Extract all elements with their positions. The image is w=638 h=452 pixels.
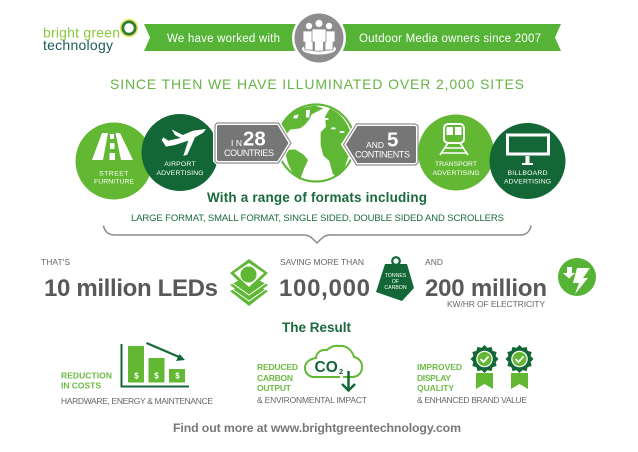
text: reduced carbon output: & ENVIRONMENTAL IMPACT: [257, 395, 367, 405]
icon: carbon weight: CARBON: [384, 285, 407, 291]
logo: [43, 20, 138, 53]
text: reduction in costs: [61, 370, 213, 406]
circle: billboard advertising: ADVERTISING: [504, 178, 551, 186]
tag: in 28 countries: [214, 122, 292, 164]
icon: quality badge one: [470, 345, 498, 389]
circle: airport advertising: ADVERTISING: [156, 170, 204, 177]
globe: [278, 104, 354, 182]
circle: transport advertising: ADVERTISING: [432, 170, 480, 177]
text: reduced carbon output: CARBON: [257, 373, 293, 383]
tag: and 5 continents: 5: [387, 128, 398, 152]
circle: transport advertising: TRANSPORT: [435, 161, 477, 168]
text: reduction in costs: HARDWARE, ENERGY & MAINTENANCE: [61, 396, 213, 406]
text: reduction in costs: IN COSTS: [61, 380, 101, 390]
logo: bright green: [43, 24, 120, 40]
circle: airport advertising: AIRPORT: [164, 161, 196, 168]
text: format list: LARGE FORMAT, SMALL FORMAT, SINGLE SIDED, DOUBLE SIDED AND SCROLLERS: [131, 213, 504, 224]
text: improved display quality: [417, 362, 527, 405]
circle: street furniture: [76, 122, 152, 200]
tag: and 5 continents: AND: [366, 140, 384, 150]
text: improved display quality: & ENHANCED BRAND VALUE: [417, 395, 527, 405]
ribbon: outdoor media owners: Outdoor Media owners since 2007: [359, 33, 541, 45]
subheading: range of formats: With a range of formats including: [207, 190, 427, 205]
icon: CO2 cloud: CO: [314, 359, 338, 376]
brace: [104, 226, 531, 243]
chart: reduction in costs: $: [154, 372, 159, 380]
circle: street furniture: STREET: [99, 170, 129, 178]
icon: carbon weight: OF: [392, 279, 399, 285]
icon: carbon weight: TONNES: [385, 273, 407, 279]
tag: in 28 countries: COUNTRIES: [224, 148, 274, 158]
tag: in 28 countries: IN: [231, 138, 242, 148]
chart: reduction in costs: [122, 343, 189, 386]
text: reduced carbon output: [257, 362, 367, 405]
text: reduced carbon output: REDUCED: [257, 362, 298, 372]
logo: technology: [43, 37, 113, 53]
text: improved display quality: DISPLAY: [417, 373, 451, 383]
icon: quality badge two: [506, 345, 534, 389]
tag: and 5 continents: CONTINENTS: [355, 150, 410, 160]
icon: CO2 cloud: [305, 346, 362, 390]
ribbon: we have worked with: We have worked with: [167, 33, 280, 45]
stat: 200 million: [425, 257, 547, 309]
circle: transport advertising: [418, 114, 494, 190]
icon: LED stack: [230, 259, 268, 306]
icon: CO2 cloud: 2: [339, 367, 343, 376]
circle: billboard advertising: [490, 123, 566, 199]
stat: 10 million LEDs: THAT'S: [41, 257, 70, 267]
text: improved display quality: IMPROVED: [417, 362, 462, 372]
circle: billboard advertising: BILLBOARD: [508, 170, 548, 177]
stat: 200 million: AND: [425, 257, 443, 267]
stat: 100,000: [279, 257, 370, 302]
text: improved display quality: QUALITY: [417, 383, 454, 393]
stat: 200 million: KW/HR OF ELECTRICITY: [447, 299, 545, 309]
tag: in 28 countries: 28: [243, 128, 266, 150]
text: reduced carbon output: OUTPUT: [257, 383, 292, 393]
stat: 10 million LEDs: [41, 257, 218, 302]
tag: and 5 continents: [342, 123, 419, 166]
heading: the result: The Result: [282, 320, 352, 335]
stat: 100,000: SAVING MORE THAN: [280, 257, 364, 267]
text: reduction in costs: REDUCTION: [61, 370, 112, 380]
icon: carbon weight: [376, 257, 414, 301]
chart: reduction in costs: $: [134, 372, 139, 380]
heading: SINCE THEN WE HAVE ILLUMINATED OVER 2,000 SITES: [110, 76, 524, 92]
chart: reduction in costs: $: [175, 372, 180, 380]
stat: 10 million LEDs: 10 million LEDs: [44, 275, 218, 302]
circle: street furniture: FURNITURE: [94, 178, 134, 186]
ribbon: outdoor media owners: [343, 24, 561, 51]
stat: 100,000: 100,000: [279, 275, 370, 302]
icon: electricity bolt: [558, 258, 596, 296]
icon: people group: [292, 11, 346, 65]
footer: website: Find out more at www.brightgreentechnology.com: [173, 421, 461, 435]
ribbon: we have worked with: [144, 24, 297, 51]
circle: airport advertising: [142, 114, 218, 191]
stat: 200 million: 200 million: [425, 275, 547, 302]
